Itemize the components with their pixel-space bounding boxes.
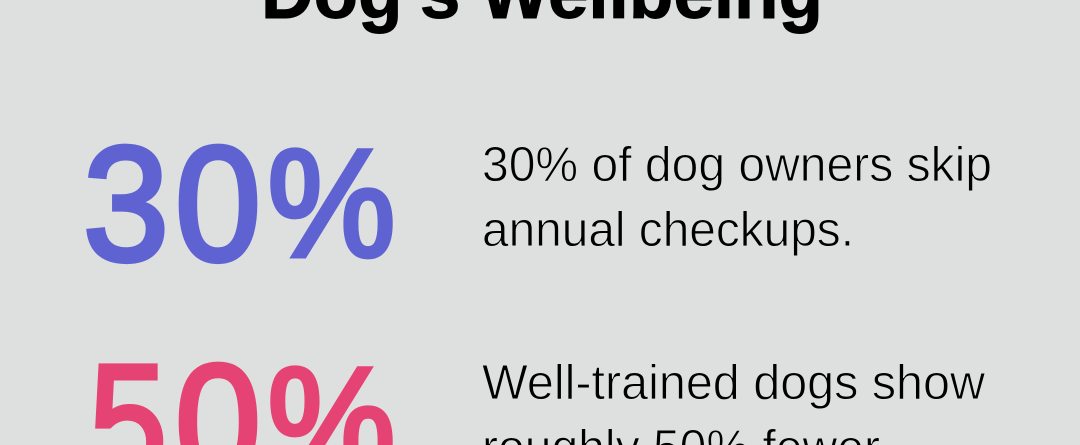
description: well-trained dogs — [482, 356, 986, 445]
stat: 30%: % — [268, 118, 396, 289]
stat: 30% — [83, 112, 396, 295]
description: annual checkups: annual checkups. — [482, 203, 854, 257]
description: well-trained dogs: Well-trained dogs show — [482, 356, 986, 410]
description: annual checkups — [482, 138, 992, 257]
stat: 30%: 3 — [83, 112, 169, 295]
stat: 30%: 0 — [175, 112, 261, 295]
stat: 50% — [89, 330, 396, 445]
description: annual checkups: 30% of dog owners skip — [482, 138, 992, 192]
